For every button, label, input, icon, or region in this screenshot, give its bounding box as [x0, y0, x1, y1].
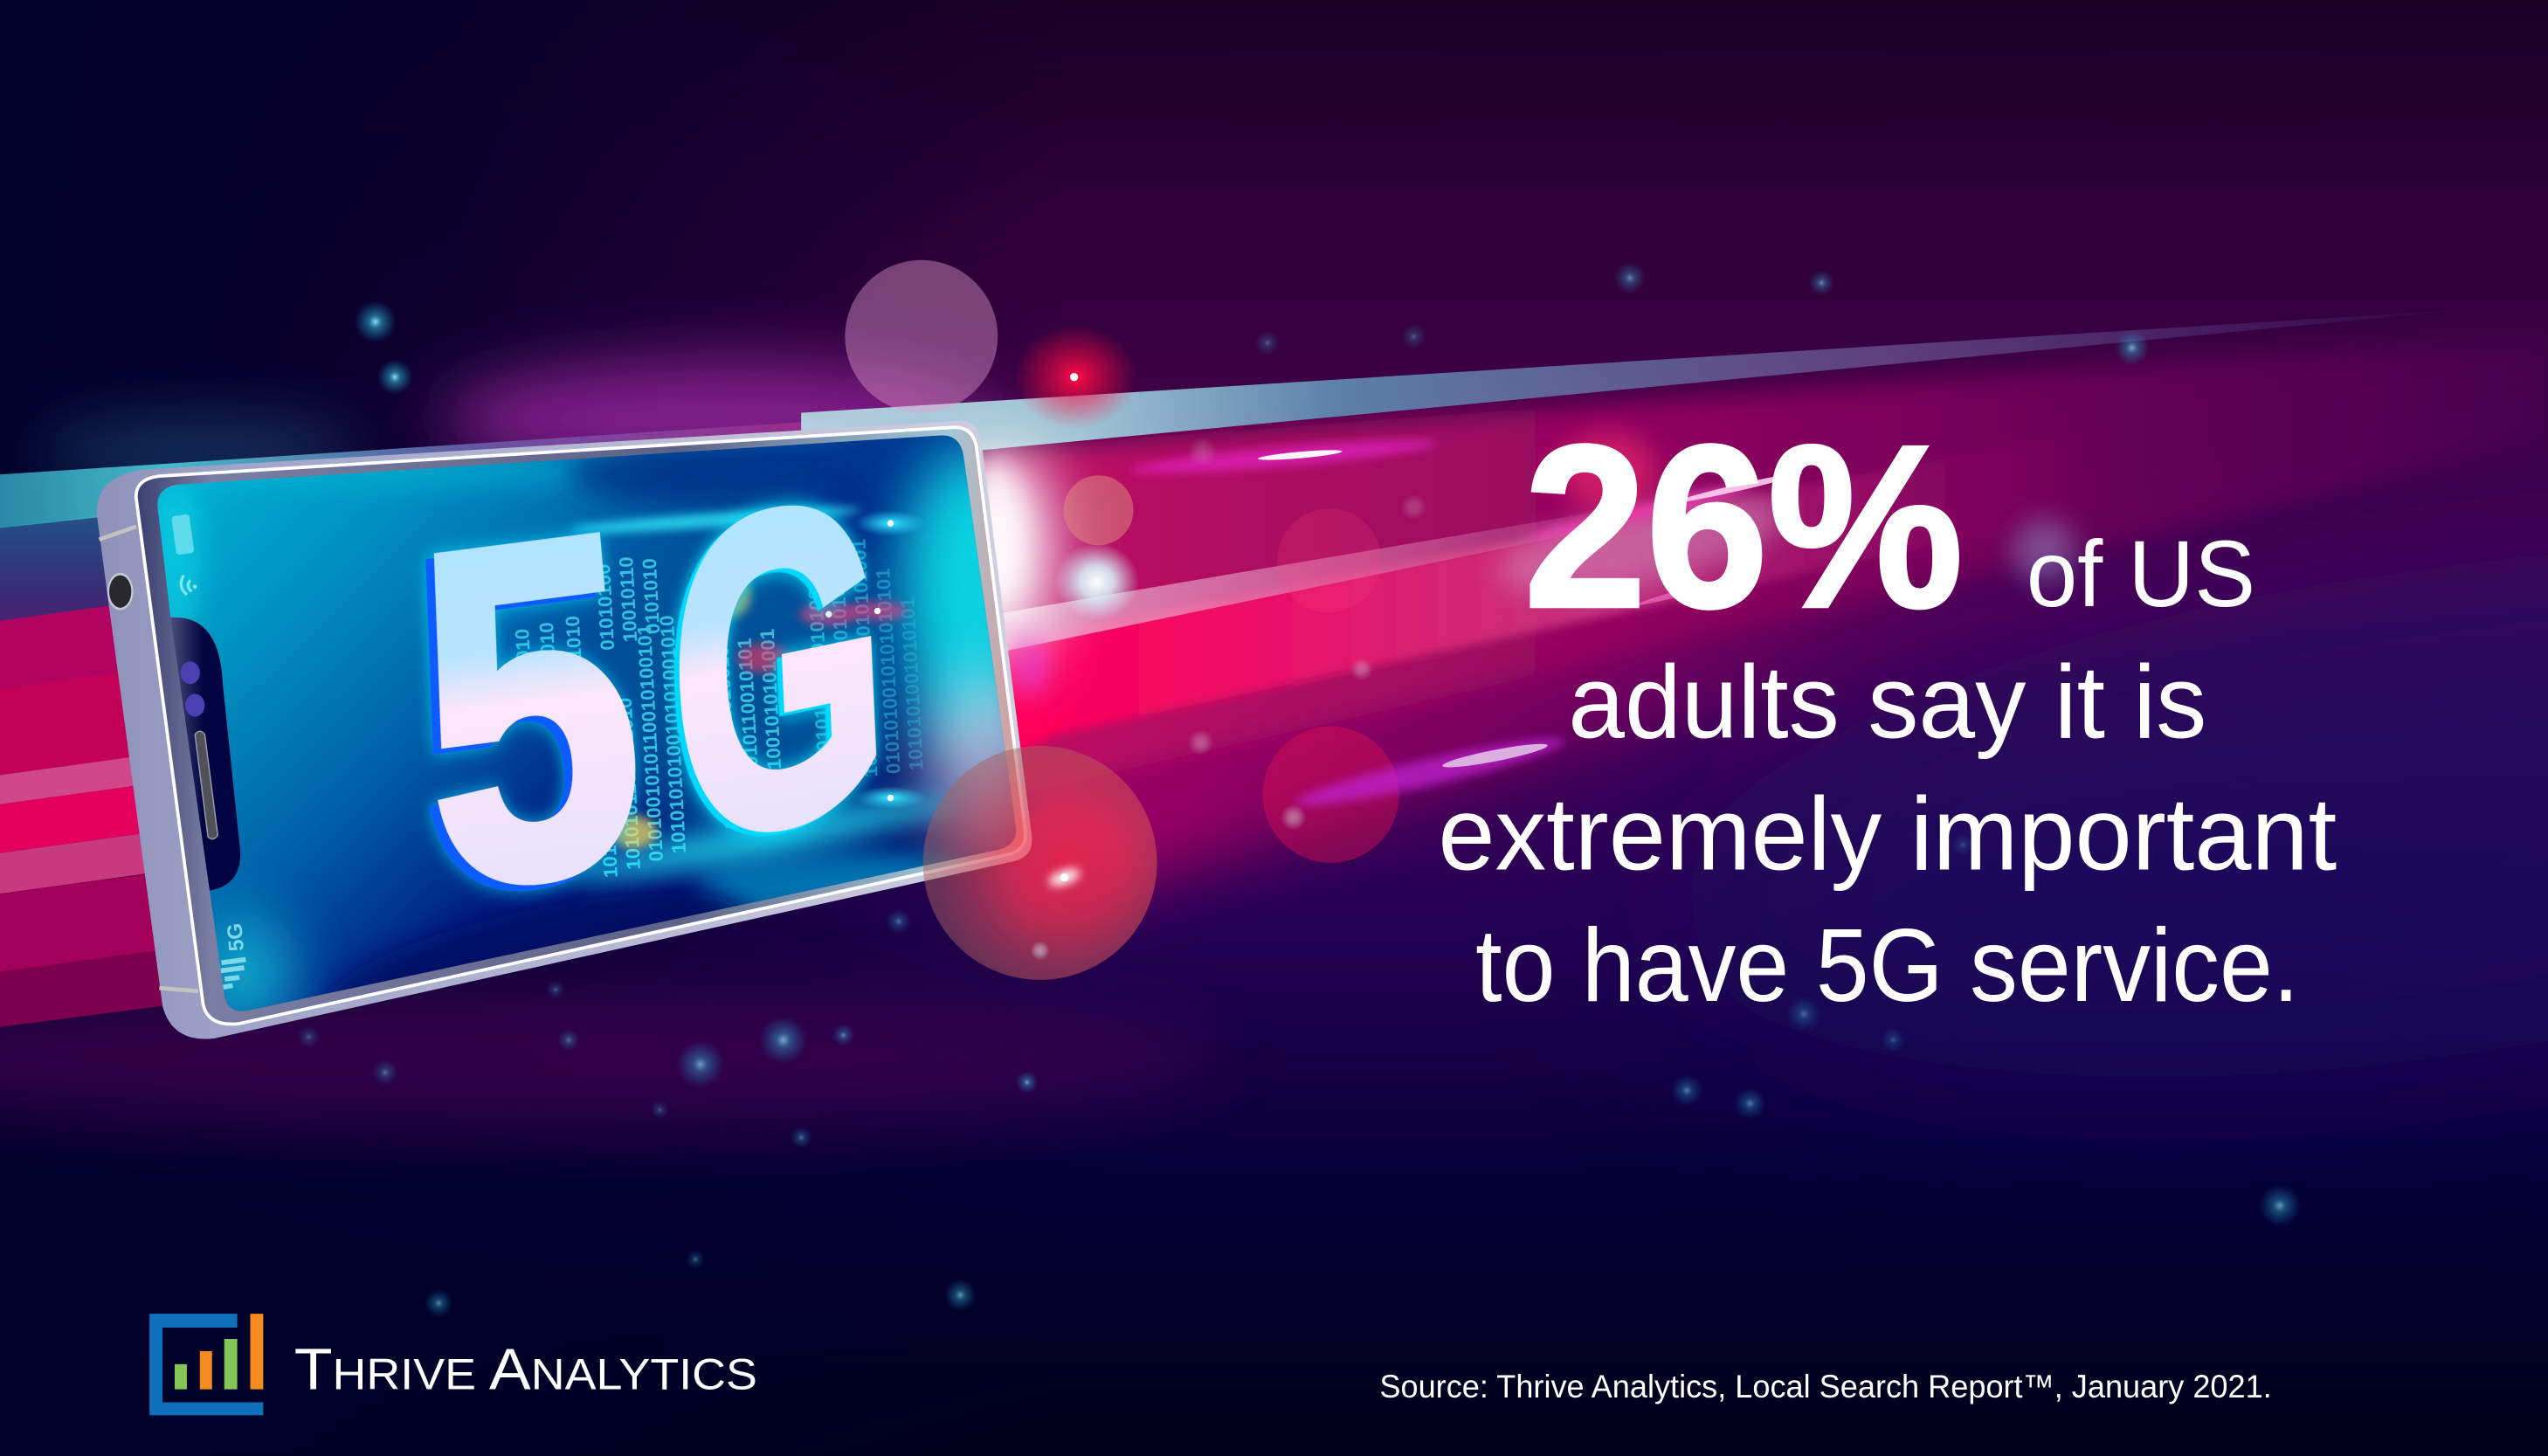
large red bokeh circle [923, 746, 1157, 980]
phone [97, 402, 1056, 1056]
source citation: Source: Thrive Analytics, Local Search Report™, January 2021. [1379, 1368, 2272, 1404]
binary data columns: 01010 [511, 628, 535, 683]
right side red band [975, 425, 2112, 774]
binary data columns: 10010110 [615, 556, 641, 643]
binary data columns: 1010101100101010 [614, 697, 645, 870]
binary data columns: 10101001010101001 [756, 628, 788, 813]
logo wordmark: THRIVE ANALYTICS [294, 1337, 757, 1403]
speed streak bands [0, 309, 2548, 1027]
binary data columns: 01010100 [592, 563, 618, 651]
left light beam [0, 419, 845, 528]
5G glyphs [401, 402, 895, 988]
binary data columns: 10110100101010010 [711, 645, 742, 830]
left side stacked bands [0, 569, 975, 1027]
logo bars [175, 1314, 263, 1390]
right side magenta wedge [975, 333, 2548, 797]
binary data columns: 1010010101010010 [591, 704, 622, 879]
light flares [1014, 325, 2077, 816]
binary data columns: 1010101010010101001010 [656, 615, 690, 854]
binary data columns: 1001010101010010101001 [847, 538, 882, 777]
adults say it is: adults say it is [1568, 645, 2206, 761]
glowing particles [297, 262, 2301, 1318]
phone screen [157, 435, 1017, 1011]
extremely important: extremely important [1438, 776, 2337, 892]
to have 5G service: to have 5G service. [1475, 907, 2299, 1024]
5G glyphs: 5 [401, 432, 659, 988]
headphone jack [107, 573, 134, 611]
of US: of US [2027, 521, 2255, 626]
phone notch with cameras [170, 618, 240, 891]
26 percent: 26% [1524, 397, 1963, 655]
binary data columns: 0101010010101010101 [872, 568, 905, 775]
right light beam [801, 309, 2478, 450]
binary data columns: 01010 [562, 615, 586, 671]
pale diagonal stripe [995, 507, 1625, 653]
binary data columns: 1010101010010101001010 [802, 545, 836, 784]
binary data columns: 1010101001010101 [896, 597, 928, 771]
Thrive Analytics logo [149, 1314, 757, 1415]
frame antenna lines [99, 527, 198, 991]
glow behind phone [956, 445, 1053, 695]
binary data columns: 0101010 [639, 558, 664, 635]
translucent bokeh circles [845, 260, 1399, 863]
binary data columns: 01010 [535, 622, 560, 677]
binary data columns: 01001010110010101 [734, 638, 765, 822]
magenta glow under red band [1007, 438, 2308, 926]
binary data columns: 0101001010110010101010 [825, 542, 860, 781]
status icons [171, 514, 249, 990]
headline statistic [1438, 397, 2337, 1024]
logo bracket [149, 1314, 263, 1415]
binary data columns [511, 538, 928, 879]
screen light streaks [569, 503, 958, 892]
phone bezel [136, 427, 1025, 1025]
phone body frame [97, 421, 1032, 1039]
status icons: 5G [223, 922, 249, 952]
5G glyphs: G [661, 402, 895, 935]
binary data columns: 0101001010110010100101 [633, 624, 667, 862]
